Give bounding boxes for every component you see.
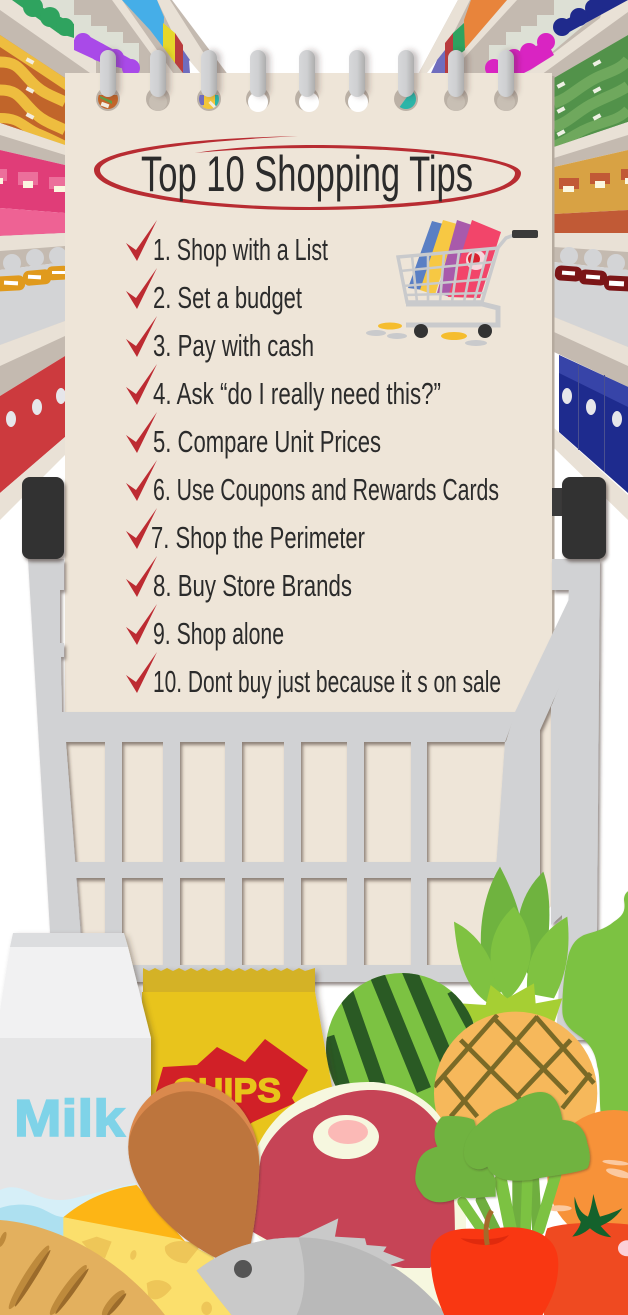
- fish body: [197, 1237, 447, 1315]
- fish fin: [298, 1218, 405, 1265]
- cart wheels: [414, 324, 492, 338]
- middle shelf rail: [554, 122, 628, 167]
- fish head: [197, 1237, 304, 1315]
- purple products top shelf: [74, 33, 140, 77]
- cart handle grip left: [22, 477, 64, 559]
- blue cloth wave: [0, 1183, 135, 1315]
- right store shelves: [415, 0, 628, 520]
- tomato stem: [572, 1194, 622, 1237]
- steak: [253, 1082, 466, 1315]
- coins: [366, 322, 487, 346]
- right connector under handle: [552, 488, 564, 516]
- tip 1: [126, 220, 328, 267]
- cart wire frame: [28, 559, 600, 1040]
- tip 1: 1. Shop with a List: [153, 232, 328, 267]
- gold and rust products: [554, 150, 628, 233]
- cart handle grip right: [562, 477, 606, 559]
- orange: [546, 1110, 628, 1243]
- chicken drumstick: [128, 1082, 259, 1258]
- chips logo: CHIPS: [172, 1072, 281, 1110]
- bottom shelf rail: [554, 317, 628, 387]
- fish eye: [234, 1260, 252, 1278]
- title: Top 10 Shopping Tips: [141, 146, 473, 202]
- tip 2: [126, 268, 302, 315]
- cart chassis: [406, 304, 498, 325]
- top-left shelf frame: [0, 0, 232, 90]
- paper sheet: [65, 73, 552, 972]
- tip 3: [126, 316, 314, 363]
- apple stem: [486, 1211, 492, 1245]
- red boxes: [0, 356, 66, 520]
- broccoli stalks: [462, 1175, 556, 1233]
- lettuce: [562, 888, 628, 1113]
- magenta products top shelf: [485, 33, 555, 80]
- chips logo: [155, 1039, 308, 1130]
- cheese wedge: [63, 1185, 237, 1315]
- title hand-drawn ellipse: [94, 136, 521, 210]
- tip 6: [126, 460, 499, 507]
- pineapple crown: [454, 867, 569, 1023]
- tip 10: [126, 652, 501, 699]
- broccoli left floret: [415, 1116, 496, 1202]
- cart basket grid: [398, 248, 498, 302]
- tip 4: 4. Ask “do I really need this?”: [153, 376, 441, 411]
- chips bag: [142, 968, 332, 1200]
- tip 9: [126, 604, 284, 651]
- grey products with orange chain: [0, 247, 69, 345]
- orange and yellow packs: [0, 35, 65, 146]
- tip 2: 2. Set a budget: [153, 280, 302, 315]
- tip 4: [126, 364, 441, 411]
- broccoli: [415, 1092, 590, 1233]
- blue boxes: [554, 355, 628, 520]
- tip 7: [126, 508, 365, 555]
- milk carton: Milk: [14, 1090, 125, 1148]
- left store shelves: [0, 0, 232, 520]
- paper shadow: [551, 76, 554, 906]
- pink products: [0, 150, 65, 236]
- broccoli main floret: [464, 1092, 590, 1181]
- large shopping cart frame: [22, 477, 606, 1040]
- bread: [0, 1220, 165, 1315]
- apple: [431, 1211, 558, 1315]
- green packs: [554, 35, 628, 147]
- cart contents: [408, 220, 501, 298]
- tip 8: [126, 556, 352, 603]
- tomato: [543, 1194, 628, 1315]
- groceries in the cart: [0, 867, 628, 1315]
- tip 3: 3. Pay with cash: [153, 328, 314, 363]
- panel: shopping list notepad: [65, 50, 554, 972]
- binding holes: [96, 90, 518, 112]
- tip 9: 9. Shop alone: [153, 616, 284, 651]
- milk carton: [0, 933, 151, 1218]
- grey products with maroon chain: [554, 247, 628, 347]
- spiral rings: [100, 50, 514, 97]
- middle shelf rail: [0, 123, 65, 165]
- tip 5: [126, 412, 381, 459]
- tip 8: 8. Buy Store Brands: [153, 568, 352, 603]
- lower shelf rail: [554, 233, 628, 270]
- watermelon: [326, 973, 474, 1112]
- pineapple: [434, 1012, 598, 1126]
- green products top shelf: [12, 0, 74, 38]
- lower shelf rail: [0, 233, 65, 270]
- tip 5: 5. Compare Unit Prices: [153, 424, 381, 459]
- illustration: small shopping cart: [366, 220, 538, 346]
- fish: [197, 1218, 447, 1315]
- tip 7: 7. Shop the Perimeter: [151, 520, 365, 555]
- navy products top shelf: [553, 0, 628, 36]
- cart handle: [496, 230, 538, 250]
- top-right shelf frame: [415, 0, 628, 80]
- bottom shelf rail: [0, 321, 65, 396]
